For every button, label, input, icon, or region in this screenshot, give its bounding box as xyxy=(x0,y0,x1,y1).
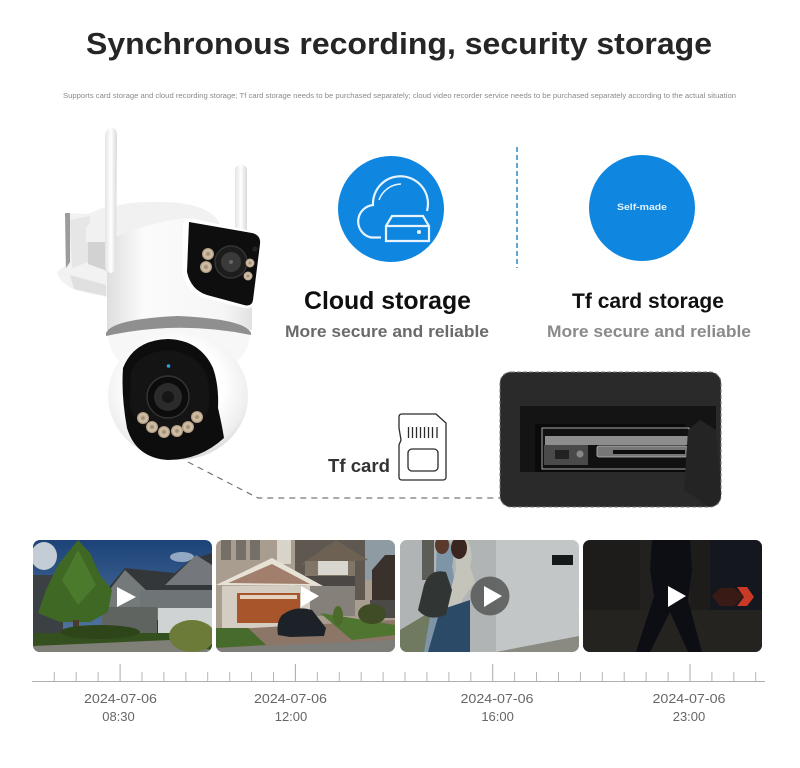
right antenna xyxy=(235,165,247,235)
video thumbnail 2: house with orange garage and car xyxy=(216,540,395,652)
left antenna xyxy=(105,128,117,273)
text: cloud storage benefit: More secure and reliable xyxy=(285,322,489,341)
camera product illustration xyxy=(57,128,261,460)
icon: self-made badge xyxy=(589,155,695,261)
title: Synchronous recording, security storage xyxy=(86,26,712,61)
timestamp 4: 23:00 xyxy=(673,709,705,724)
connector dashed line xyxy=(188,462,500,498)
icon: play button xyxy=(484,586,502,607)
timestamp 2: 2024-07-06 xyxy=(254,691,327,706)
heading: cloud storage: Cloud storage xyxy=(304,287,471,315)
label: tf card: Tf card xyxy=(328,456,390,476)
icon: sd card xyxy=(399,414,446,480)
icon: self-made badge: Self-made xyxy=(617,202,667,212)
divider xyxy=(516,147,518,268)
dome ball xyxy=(108,332,248,460)
icon: cloud storage xyxy=(338,156,444,262)
icon: play button xyxy=(668,586,686,607)
timestamp 2: 12:00 xyxy=(275,709,307,724)
timestamp 3: 16:00 xyxy=(481,709,514,724)
timestamp 4: 2024-07-06 xyxy=(652,691,726,706)
timestamp 1 xyxy=(84,691,157,724)
timestamp 2 xyxy=(254,691,327,724)
top collar xyxy=(86,202,219,242)
heading: tf card storage: Tf card storage xyxy=(572,290,724,313)
icon: play button xyxy=(117,587,136,607)
timestamp 4 xyxy=(652,691,726,724)
subtitle note: Supports card storage and cloud recording storage; Tf card storage needs to be purchased separately; cloud video recorder service needs to be purchased separately according to the actual situation xyxy=(63,93,736,100)
timestamp 1: 08:30 xyxy=(102,709,135,724)
video thumbnail 4: night intruder xyxy=(583,540,762,652)
timeline axis xyxy=(32,664,765,682)
wall mount bracket xyxy=(57,204,112,298)
video thumbnail 1: house and tree xyxy=(31,540,215,652)
timestamp 1: 2024-07-06 xyxy=(84,691,157,706)
gimbal ring xyxy=(106,316,251,336)
upper housing xyxy=(107,218,252,330)
ball neck xyxy=(108,326,250,362)
icon: play button xyxy=(301,586,319,607)
text: tf card benefit: More secure and reliable xyxy=(547,322,751,341)
timestamp 3: 2024-07-06 xyxy=(460,691,534,706)
tf card slot photo xyxy=(500,372,721,507)
upper camera module xyxy=(182,219,261,308)
front camera face xyxy=(122,339,224,460)
timestamp 3 xyxy=(460,691,534,724)
video thumbnail 3: two people by a wall xyxy=(400,536,579,652)
